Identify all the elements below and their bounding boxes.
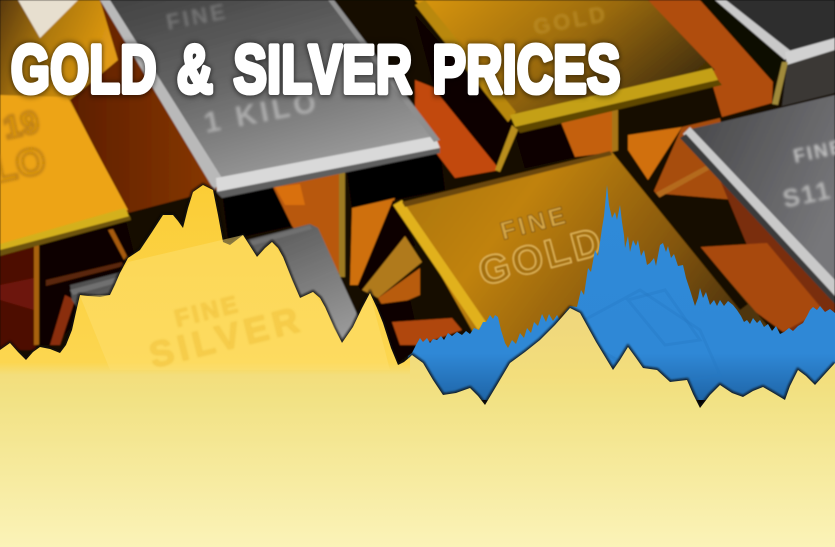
faint silver bar inside the yellow chart — [80, 235, 390, 376]
title shadow: GOLD & SILVER PRICES — [11, 32, 621, 108]
centre gold bar: FINE — [497, 201, 571, 246]
top silver bar — [100, 0, 440, 198]
title: GOLD & SILVER PRICES — [11, 31, 621, 107]
right silver bar: S11 — [780, 176, 834, 214]
yellow gold price chart — [0, 185, 835, 547]
centre gold bar — [393, 150, 780, 380]
chart shadow line — [0, 185, 835, 408]
top-left gold bar — [0, 0, 131, 256]
lower silver bar — [70, 224, 362, 345]
right silver bar — [680, 95, 835, 304]
gap shapes between the bars — [0, 0, 835, 365]
top silver bar: 1 KILO — [201, 86, 323, 140]
centre gold bar: GOLD — [474, 219, 609, 295]
photo background: gold and silver bars — [0, 0, 835, 400]
blue silver price chart — [400, 185, 835, 400]
faint silver bar inside the yellow chart: SILVER — [145, 298, 308, 376]
top right silver bar — [715, 0, 835, 106]
top-left gold bar: 19 — [0, 103, 42, 146]
top centre gold bar — [415, 0, 722, 172]
faint silver bar inside the yellow chart: FINE — [172, 290, 243, 333]
top centre gold bar: GOLD — [531, 1, 610, 40]
